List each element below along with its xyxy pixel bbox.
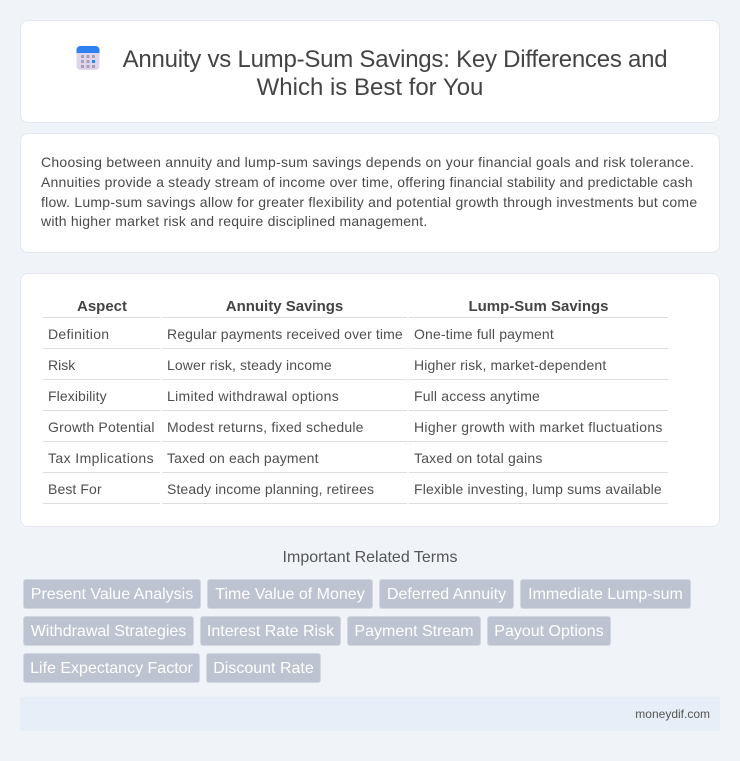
- intro paragraph: Annuities provide a steady stream of income over time, offering financial stability and predictable cash: [41, 174, 693, 190]
- comparison table: Annuity Savings: [226, 298, 343, 315]
- related term tags: Interest Rate Risk: [207, 623, 334, 640]
- comparison table: Best For: [48, 481, 102, 497]
- table card: [20, 273, 720, 527]
- comparison table: Taxed on each payment: [167, 450, 319, 466]
- icon: calendar: [76, 46, 100, 70]
- title: Annuity vs Lump-Sum Savings: Key Differences and: [123, 46, 667, 73]
- comparison table: Limited withdrawal options: [167, 388, 339, 404]
- comparison table: Growth Potential: [48, 419, 155, 435]
- comparison table: Risk: [48, 357, 75, 373]
- comparison table: Tax Implications: [48, 450, 154, 466]
- comparison table: Taxed on total gains: [414, 450, 543, 466]
- comparison table: Aspect: [77, 298, 127, 315]
- comparison table: One-time full payment: [414, 326, 554, 342]
- intro card: [20, 133, 720, 253]
- footer source: moneydif.com: [635, 707, 710, 721]
- related term tags: Immediate Lump-sum: [528, 586, 683, 603]
- related term tags: Payment Stream: [354, 623, 474, 640]
- comparison table: Lower risk, steady income: [167, 357, 332, 373]
- comparison table: Steady income planning, retirees: [167, 481, 374, 497]
- intro paragraph: with higher market risk and require disciplined management.: [41, 213, 428, 229]
- intro paragraph: flow. Lump-sum savings allow for greater flexibility and potential growth through investments but come: [41, 194, 697, 210]
- comparison table: Flexible investing, lump sums available: [414, 481, 662, 497]
- intro paragraph: Choosing between annuity and lump-sum savings depends on your financial goals and risk tolerance.: [41, 154, 694, 170]
- related term tags: Life Expectancy Factor: [30, 660, 193, 677]
- related term tags: [23, 579, 691, 683]
- related term tags: Present Value Analysis: [31, 586, 193, 603]
- comparison table: Higher risk, market-dependent: [414, 357, 606, 373]
- comparison table: [43, 298, 668, 504]
- comparison table: Full access anytime: [414, 388, 540, 404]
- related term tags: Time Value of Money: [215, 586, 365, 603]
- title: Which is Best for You: [257, 74, 483, 101]
- comparison table: Flexibility: [48, 388, 107, 404]
- related terms heading: Important Related Terms: [283, 549, 457, 566]
- footer bar: [20, 697, 720, 731]
- related term tags: Discount Rate: [213, 660, 314, 677]
- title: [122, 46, 667, 101]
- comparison table: Higher growth with market fluctuations: [414, 419, 663, 435]
- comparison table: Regular payments received over time: [167, 326, 403, 342]
- comparison table: Lump-Sum Savings: [468, 298, 609, 315]
- header card: [20, 20, 720, 123]
- related term tags: Deferred Annuity: [387, 586, 506, 603]
- related term tags: Payout Options: [494, 623, 604, 640]
- related term tags: Withdrawal Strategies: [31, 623, 186, 640]
- comparison table: Modest returns, fixed schedule: [167, 419, 364, 435]
- intro paragraph: [41, 154, 697, 229]
- comparison table: Definition: [48, 326, 109, 342]
